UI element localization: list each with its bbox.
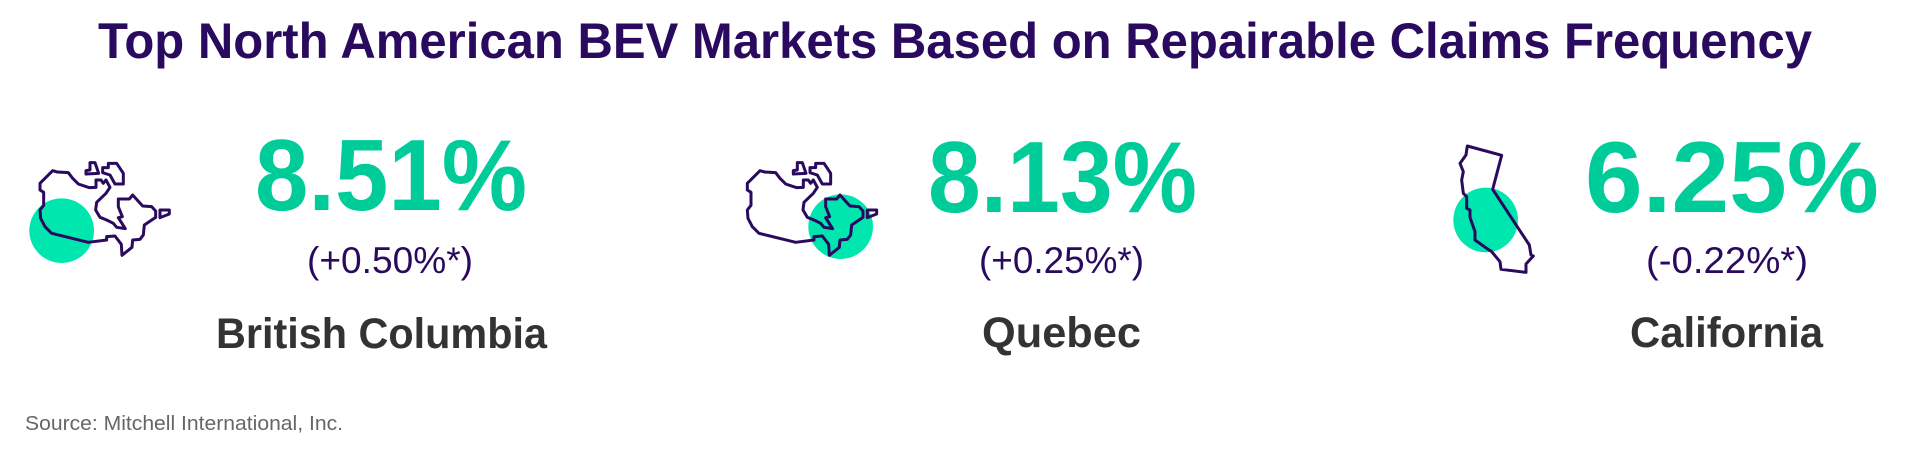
- title: Top North American BEV Markets Based on Repairable Claims Frequency: [98, 13, 1812, 69]
- panel: British Columbia: [29, 120, 548, 358]
- value: British Columbia frequency: 8.51%: [255, 120, 527, 232]
- icon: Canada map with circle over British Columbia: [29, 163, 169, 263]
- change: Quebec: (+0.25%*): [979, 240, 1144, 281]
- icon: Canada map with circle over Quebec: [747, 163, 877, 259]
- label: British Columbia: British Columbia: [216, 310, 548, 358]
- value: Quebec frequency: 8.13%: [928, 122, 1197, 234]
- panel: Quebec: [747, 122, 1197, 357]
- label: Quebec: Quebec: [982, 309, 1141, 357]
- label: California: California: [1630, 309, 1824, 357]
- source note: Source: Mitchell International, Inc.: [25, 412, 343, 435]
- change: British Columbia: (+0.50%*): [307, 240, 473, 281]
- change: California: (-0.22%*): [1646, 240, 1808, 281]
- value: California frequency: 6.25%: [1585, 122, 1879, 234]
- icon: California map with circle: [1453, 146, 1533, 272]
- panel: California: [1453, 122, 1879, 357]
